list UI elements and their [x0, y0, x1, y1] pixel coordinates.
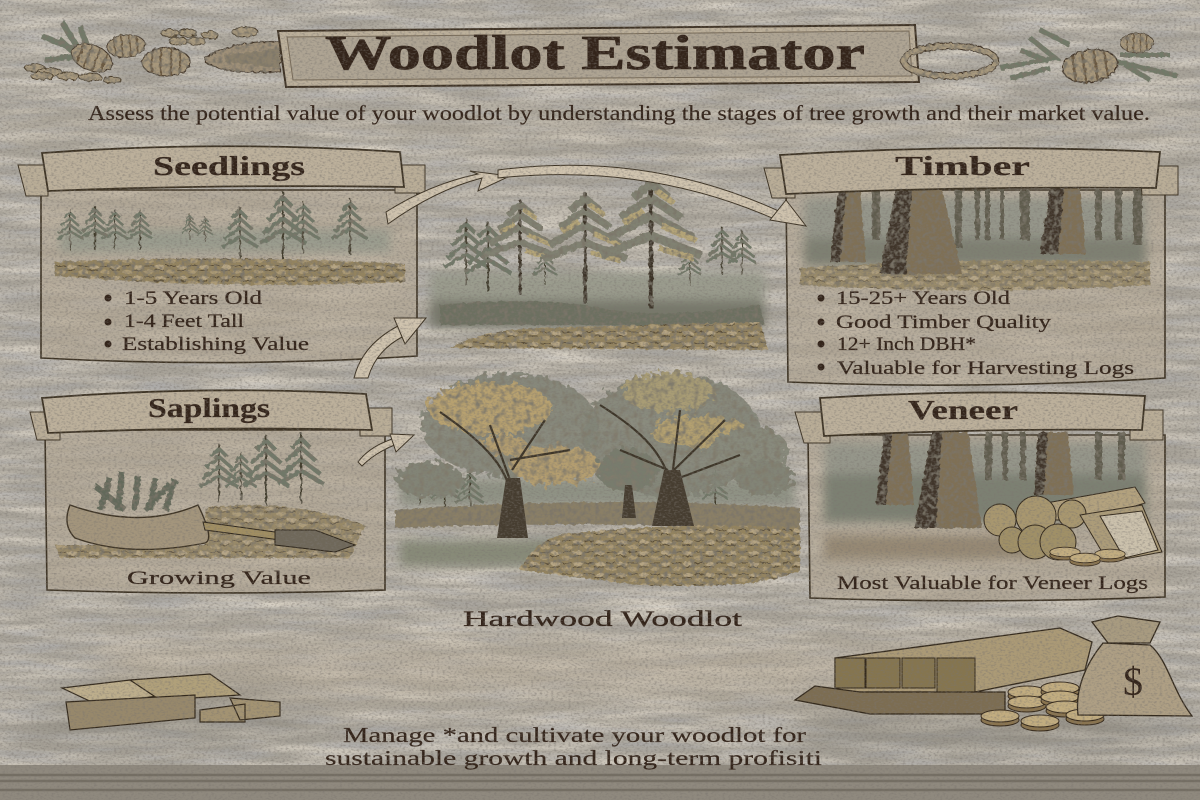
- timber bullets: 15-25+ Years Old: [836, 288, 1011, 309]
- seedlings bullets: 1-4 Feet Tall: [124, 311, 244, 332]
- footer text: Manage *and cultivate your woodlot for: [343, 723, 806, 747]
- seedlings banner: Seedlings: [153, 151, 305, 181]
- veneer banner: Veneer: [908, 395, 1018, 425]
- hardwood woodlot label: Hardwood Woodlot: [463, 606, 742, 631]
- title: Woodlot Estimator: [325, 25, 865, 80]
- saplings scene: [55, 433, 365, 558]
- top right rope and pine decoration: [904, 30, 1178, 86]
- hardwood woodlot scene: [395, 372, 800, 586]
- timber banner: Timber: [895, 151, 1030, 181]
- timber bullets: 12+ Inch DBH*: [837, 334, 976, 355]
- timber bullets: Good Timber Quality: [836, 312, 1052, 333]
- panel: veneer: [795, 392, 1165, 601]
- saplings banner: Saplings: [148, 393, 270, 423]
- footer text: [325, 723, 822, 770]
- seedlings bullets: Establishing Value: [122, 334, 309, 355]
- timber bullets: Valuable for Harvesting Logs: [837, 358, 1134, 379]
- timber bullets: [818, 288, 1134, 379]
- icon: sack and garden fork: [67, 505, 355, 552]
- top left pine cone decoration: [25, 22, 280, 83]
- saplings caption: Growing Value: [127, 568, 311, 589]
- arrow: seedlings to timber arc: [386, 165, 806, 226]
- timber banner: [764, 148, 1178, 198]
- seedlings scene: [55, 192, 405, 285]
- veneer scene: [824, 432, 1146, 559]
- icon: lumber, coins and money bag: [795, 616, 1192, 731]
- icon: log pile and paper: [984, 487, 1162, 566]
- panel: seedlings: [18, 146, 425, 363]
- veneer caption: Most Valuable for Veneer Logs: [837, 573, 1148, 594]
- panel: saplings: [30, 390, 392, 593]
- title plaque: [278, 25, 919, 87]
- seedlings banner: [18, 146, 425, 196]
- central conifer scene: [430, 177, 768, 350]
- panel: timber: [764, 148, 1178, 385]
- arrow: saplings to hardwoods: [358, 434, 414, 466]
- saplings card: [45, 430, 385, 593]
- seedlings card: [41, 190, 417, 363]
- veneer card: [808, 435, 1165, 601]
- saplings banner: [30, 390, 392, 440]
- icon: lumber, coins and money bag: $: [1123, 659, 1143, 704]
- timber card: [786, 190, 1165, 385]
- timber scene: [800, 188, 1150, 290]
- icon: stacked lumber left: [62, 674, 280, 730]
- subtitle: Assess the potential value of your woodlot by understanding the stages of tree growth and their market value.: [88, 101, 1150, 125]
- footer text: sustainable growth and long-term profisiti: [325, 746, 822, 770]
- seedlings bullets: [104, 288, 309, 355]
- arrow: saplings to conifers: [354, 318, 426, 378]
- veneer banner: [795, 392, 1163, 443]
- seedlings bullets: 1-5 Years Old: [124, 288, 263, 309]
